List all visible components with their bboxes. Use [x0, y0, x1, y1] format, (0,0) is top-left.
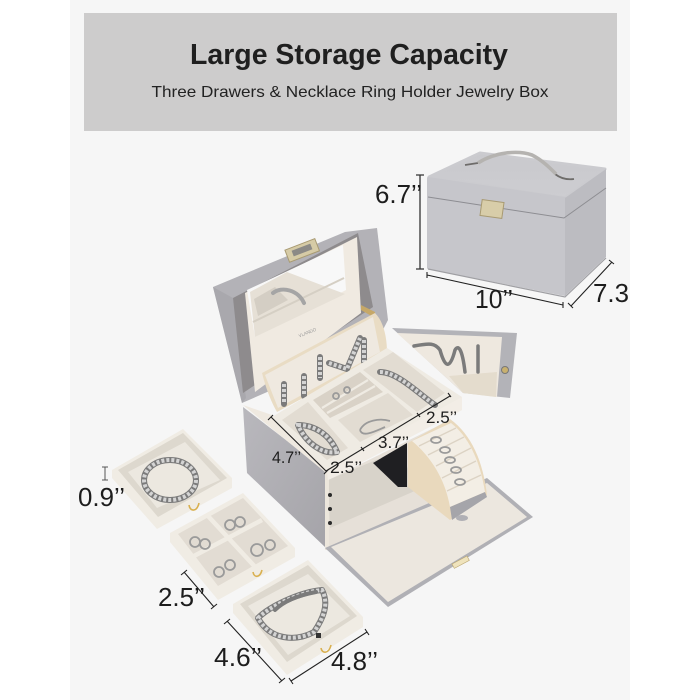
dimension: 4.6: 4.6’’ [214, 642, 262, 672]
dimension: 2.5 [158, 570, 217, 612]
dimension: 4.6 [214, 619, 285, 683]
necklace panel [262, 313, 387, 412]
clasp: lid [285, 239, 319, 262]
front door [325, 478, 533, 607]
dimension: 6.7 height: 6.7’’ [375, 179, 422, 209]
ring holder [408, 419, 487, 521]
tray: bracelets [233, 560, 363, 675]
label: 4.7: 4.7’’ [272, 448, 301, 467]
subtitle: Three Drawers & Necklace Ring Holder Jewelry Box [152, 84, 548, 101]
dimension: 0.9: 0.9’’ [78, 482, 125, 512]
dimension: 4.8: 4.8’’ [331, 646, 378, 676]
label: 2.5 back: 2.5’’ [426, 408, 457, 427]
brand mark: VLANDO [298, 327, 317, 338]
dimension: 0.9 [78, 467, 125, 512]
hinge [361, 305, 375, 318]
open jewelry box [213, 228, 533, 607]
label: 2.5 front: 2.5’’ [330, 458, 362, 477]
dimension: 7.3 depth: 7.3’’ [593, 278, 640, 308]
dimension: 10 width [427, 272, 563, 314]
dimension: 7.3 depth [568, 260, 640, 308]
body side [243, 407, 325, 547]
right margin [630, 0, 700, 700]
tray: necklace [112, 429, 232, 529]
dimension: 2.5: 2.5’’ [158, 582, 205, 612]
title: Large Storage Capacity [190, 39, 508, 71]
top tray [272, 348, 462, 480]
closed jewelry box [428, 152, 606, 297]
tray: rings [170, 493, 295, 600]
background panel [70, 0, 630, 700]
handle [465, 152, 574, 179]
banner [84, 13, 617, 131]
lid [213, 228, 388, 403]
dimension lines: top tray [268, 393, 457, 477]
clasp [480, 200, 504, 218]
body rim [243, 405, 329, 472]
label: 3.7: 3.7’’ [378, 433, 409, 452]
dimension: 4.8 [289, 629, 378, 684]
dimension: 6.7 height [375, 175, 424, 269]
right side door [392, 328, 517, 398]
dimension: 10 width: 10’’ [475, 284, 513, 314]
mirror [247, 245, 346, 337]
lower compartment [325, 420, 470, 550]
